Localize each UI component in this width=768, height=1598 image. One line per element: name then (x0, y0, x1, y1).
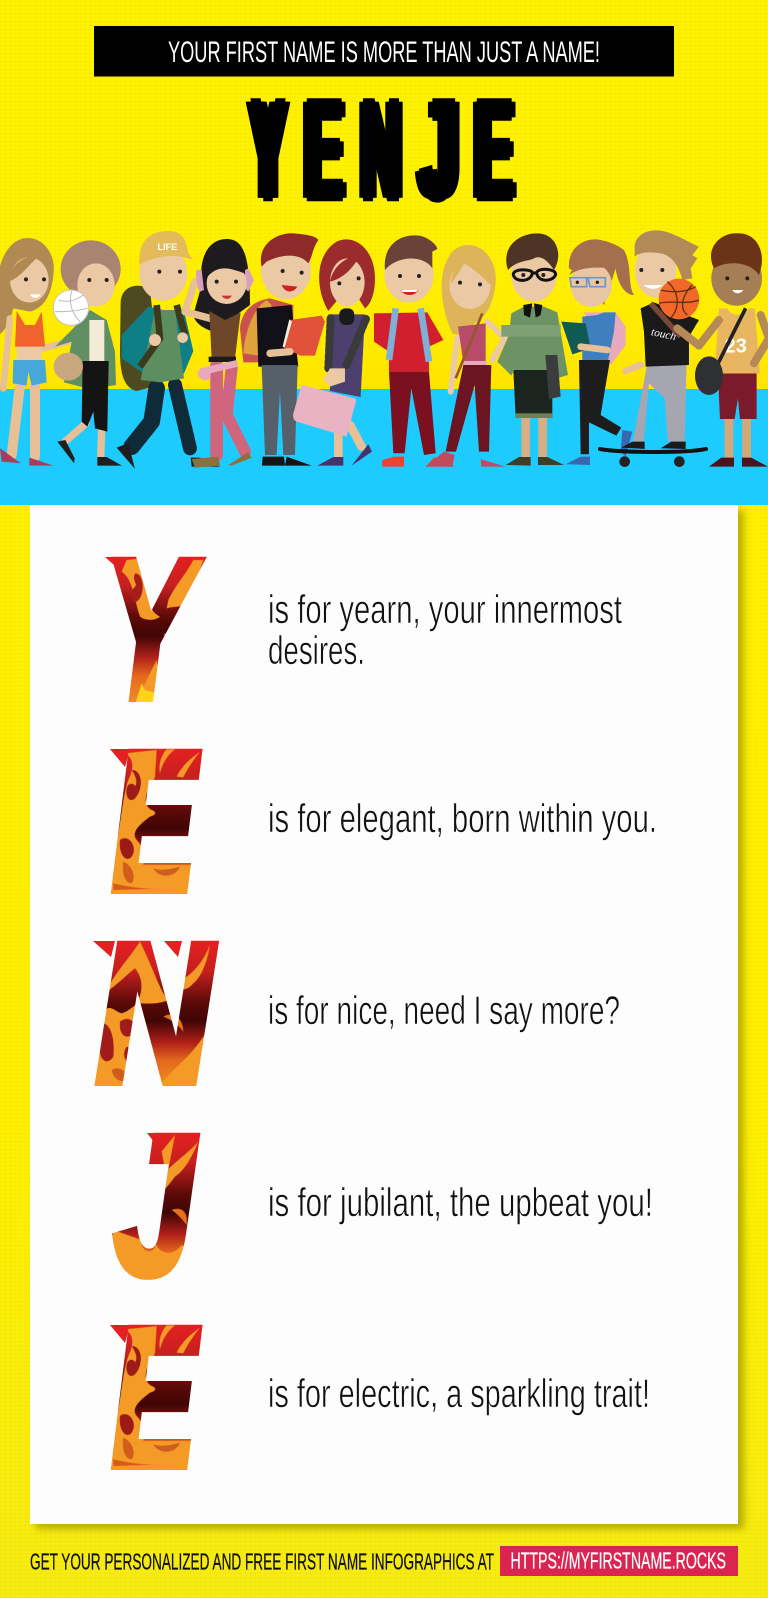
banner: black tagline bar (94, 26, 674, 76)
text: N meaning: is for nice, need I say more? (268, 989, 620, 1033)
figure 10: girl with tablet and ponytail (561, 239, 634, 465)
panel: white letter card (30, 505, 738, 1524)
figure 2: girl with volleyball (53, 240, 122, 466)
figure 3: hiker with backpack and cap (117, 231, 220, 469)
figure 7: boy in red t-shirt (374, 235, 454, 467)
figure 3: hiker with backpack and cap: LIFE (157, 242, 177, 252)
fire letter E: E (112, 710, 199, 932)
fire letter Y: Y (105, 518, 201, 740)
title: YENJE (246, 72, 517, 228)
title: YENJE: E (474, 72, 514, 228)
fire letter N: N (96, 902, 215, 1124)
title: YENJE: N (361, 72, 401, 228)
fire letter E (110, 1286, 199, 1508)
letter row 5: fire E (110, 1286, 650, 1508)
fire letter J: J (114, 1094, 197, 1316)
letter row 1: fire Y (105, 518, 633, 740)
title: YENJE: J (419, 72, 458, 228)
figure 12: boy in tank top with shoulder bag: 23 (725, 336, 747, 358)
figure 9: boy with glasses and shorts (497, 233, 568, 466)
figure 1: girl in orange top (0, 238, 80, 466)
text: Y meaning: is for yearn, your innermost (268, 588, 622, 632)
illustration: group of twelve young people (0, 230, 768, 469)
figure 6: girl with pink bag (293, 239, 375, 466)
letter row 3: fire N (93, 902, 620, 1124)
title: YENJE: Y (252, 72, 284, 228)
figure 5: boy reading a book (240, 233, 325, 466)
text: Y meaning: desires. (268, 629, 365, 673)
figure 11: skateboarder with basketball: touch (650, 326, 677, 343)
figures on the right half (374, 230, 768, 467)
figure 4: girl with headphones (185, 239, 254, 468)
illustration backdrop: blue floor band (0, 389, 768, 505)
letter row 2: fire E (110, 710, 657, 932)
figures on the left half (0, 231, 375, 469)
figure 12: boy in tank top with shoulder bag (677, 233, 768, 467)
illustration backdrop: yellow wall (0, 232, 768, 389)
figure 11: skateboarder with basketball (600, 230, 706, 467)
title: YENJE: E (304, 72, 343, 228)
fire letter E: E (112, 1286, 199, 1508)
letter row 4: fire J (114, 1094, 653, 1316)
figure 8: blonde girl with shoulder bag (426, 245, 506, 467)
fire letter E (110, 710, 199, 932)
